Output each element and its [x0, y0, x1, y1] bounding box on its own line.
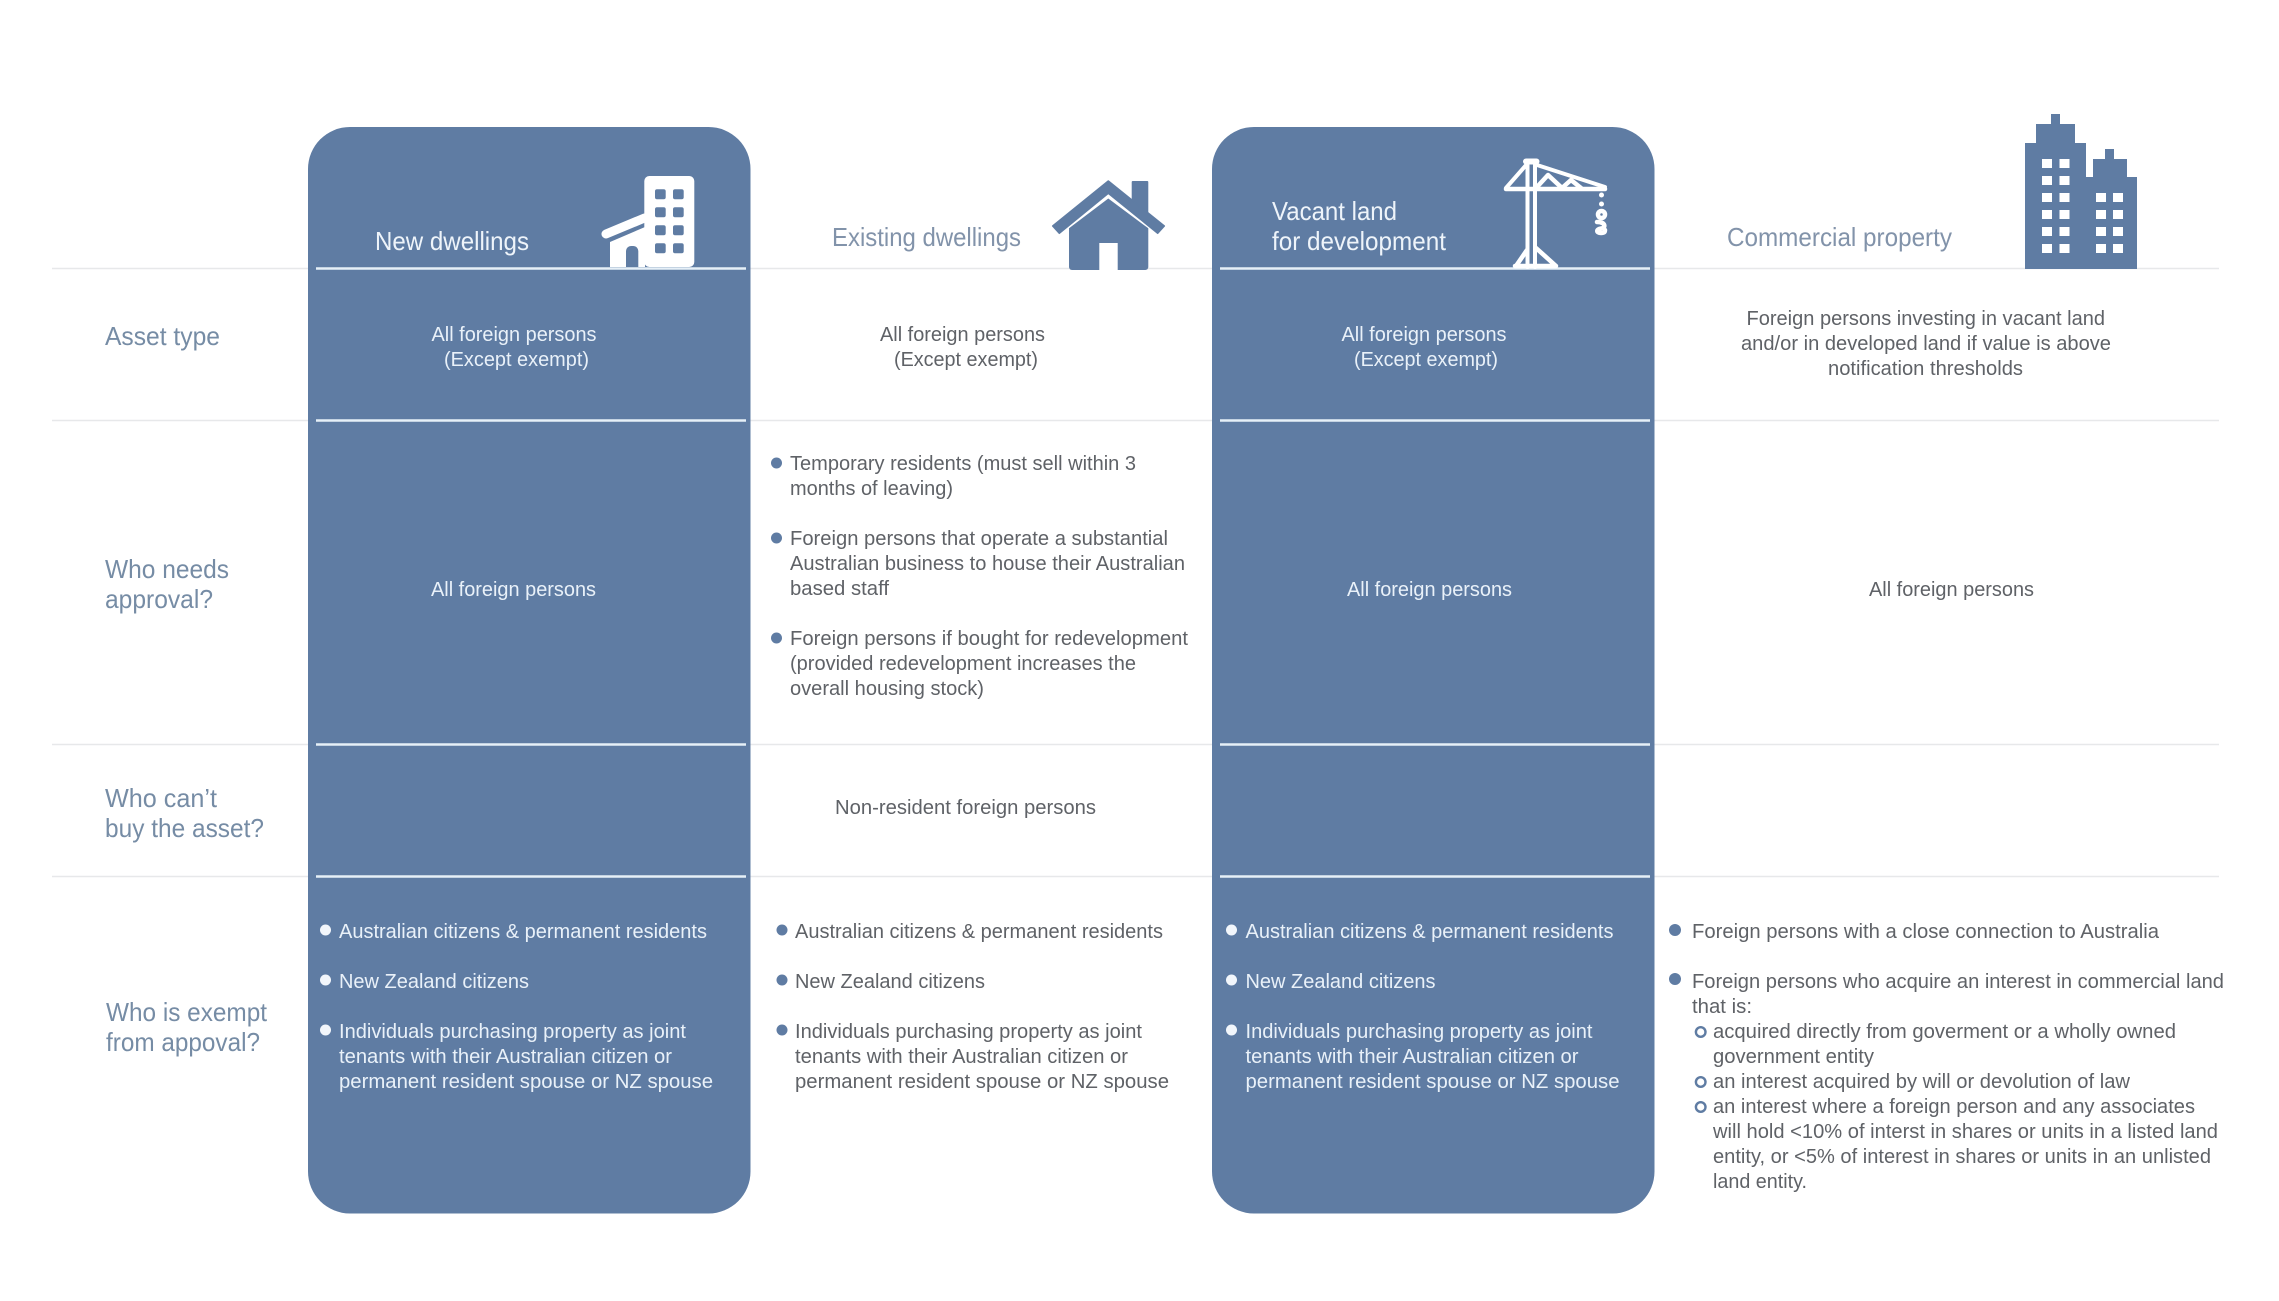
who needs approval: existing dwellings list: Temporary residents (must sell within 3: [790, 453, 1136, 475]
row label: asset type: Asset type: [105, 321, 220, 351]
panel: new dwellings column background: [308, 127, 750, 1214]
exempt list: commercial property: acquired directly from goverment or a wholly owned: [1713, 1021, 2176, 1043]
row label: who can't buy the asset: Who can’t: [105, 783, 218, 813]
exempt list: existing dwellings: [776, 921, 1169, 1093]
exempt list: commercial property: an interest where a foreign person and any associates: [1713, 1096, 2195, 1118]
exempt list: commercial property: government entity: [1713, 1046, 1874, 1068]
asset type: new dwellings: [432, 324, 596, 371]
row label: who is exempt: from appoval?: [106, 1027, 260, 1057]
asset type: commercial property: notification thresholds: [1828, 358, 2023, 380]
row label: who can't buy the asset: buy the asset?: [105, 813, 264, 843]
heading: vacant land for development: [1272, 196, 1447, 256]
exempt list: existing dwellings: Individuals purchasing property as joint: [795, 1021, 1142, 1043]
exempt list: commercial property: entity, or <5% of interest in shares or units in an unlisted: [1713, 1146, 2211, 1168]
row label: who is exempt: [106, 997, 268, 1057]
who can't buy: existing dwellings: Non-resident foreign persons: [835, 797, 1096, 819]
asset type: commercial property: and/or in developed land if value is above: [1741, 333, 2111, 355]
heading: vacant land for development: Vacant land: [1272, 196, 1397, 226]
row label: who needs approval: [105, 554, 229, 614]
who needs approval: existing dwellings list: months of leaving): [790, 478, 953, 500]
exempt list: existing dwellings: Australian citizens & permanent residents: [795, 921, 1163, 943]
asset type: existing dwellings: (Except exempt): [894, 349, 1038, 371]
asset type: existing dwellings: All foreign persons: [880, 324, 1045, 346]
exempt list: commercial property: Foreign persons with a close connection to Australia: [1692, 921, 2160, 943]
who needs approval: new dwellings: All foreign persons: [431, 579, 596, 601]
asset type: vacant land: (Except exempt): [1354, 349, 1498, 371]
exempt list: new dwellings: tenants with their Australian citizen or: [339, 1046, 672, 1068]
icon: office towers: [2025, 114, 2137, 269]
who needs approval: commercial property: All foreign persons: [1869, 579, 2034, 601]
who needs approval: existing dwellings list: Foreign persons that operate a substantial: [790, 528, 1168, 550]
exempt list: commercial property: Foreign persons who acquire an interest in commercial land: [1692, 971, 2224, 993]
row label: who needs approval: approval?: [105, 584, 213, 614]
exempt list: commercial property: that is:: [1692, 996, 1752, 1018]
exempt list: new dwellings: permanent resident spouse or NZ spouse: [339, 1071, 713, 1093]
exempt list: existing dwellings: tenants with their Australian citizen or: [795, 1046, 1128, 1068]
heading: vacant land for development: for development: [1272, 226, 1447, 256]
asset type: existing dwellings: [880, 324, 1045, 371]
heading: existing dwellings: Existing dwellings: [832, 222, 1021, 252]
who needs approval: existing dwellings list: Foreign persons if bought for redevelopment: [790, 628, 1188, 650]
exempt list: vacant land: Australian citizens & permanent residents: [1246, 921, 1614, 943]
who needs approval: existing dwellings list: (provided redevelopment increases the: [790, 653, 1136, 675]
asset type: new dwellings: All foreign persons: [432, 324, 596, 346]
who needs approval: existing dwellings list: based staff: [790, 578, 889, 600]
asset type: commercial property: Foreign persons investing in vacant land: [1746, 308, 2105, 330]
row label: who can't buy the asset: [105, 783, 264, 843]
asset type: vacant land: [1342, 324, 1506, 371]
exempt list: vacant land: New Zealand citizens: [1246, 971, 1436, 993]
row label: who needs approval: Who needs: [105, 554, 229, 584]
who needs approval: vacant land: All foreign persons: [1347, 579, 1512, 601]
icon: house: [1053, 181, 1164, 270]
exempt list: commercial property: an interest acquired by will or devolution of law: [1713, 1071, 2131, 1093]
exempt list: vacant land: permanent resident spouse or NZ spouse: [1246, 1071, 1620, 1093]
exempt list: commercial property: will hold <10% of interst in shares or units in a listed land: [1712, 1121, 2218, 1143]
who needs approval: existing dwellings list: [771, 453, 1188, 700]
exempt list: new dwellings: New Zealand citizens: [339, 971, 529, 993]
who needs approval: existing dwellings list: overall housing stock): [790, 678, 984, 700]
exempt list: new dwellings: Australian citizens & permanent residents: [339, 921, 707, 943]
row label: who is exempt: Who is exempt: [106, 997, 268, 1027]
icon: apartment building with house: [606, 176, 694, 267]
asset type: commercial property: [1741, 308, 2111, 380]
exempt list: vacant land: [1226, 921, 1620, 1093]
who needs approval: existing dwellings list: Australian business to house their Australian: [790, 553, 1185, 575]
exempt list: vacant land: tenants with their Australian citizen or: [1246, 1046, 1579, 1068]
asset type: new dwellings: (Except exempt): [444, 349, 589, 371]
icon: crane: [1506, 162, 1605, 267]
exempt list: vacant land: Individuals purchasing property as joint: [1246, 1021, 1593, 1043]
exempt list: existing dwellings: New Zealand citizens: [795, 971, 985, 993]
exempt list: commercial property: [1669, 921, 2224, 1193]
asset type: vacant land: All foreign persons: [1342, 324, 1506, 346]
exempt list: new dwellings: [320, 921, 713, 1093]
exempt list: new dwellings: Individuals purchasing property as joint: [339, 1021, 686, 1043]
heading: commercial property: Commercial property: [1727, 222, 1952, 252]
panel: vacant land column background: [1212, 127, 1654, 1214]
exempt list: existing dwellings: permanent resident spouse or NZ spouse: [795, 1071, 1169, 1093]
heading: new dwellings: New dwellings: [375, 226, 529, 256]
exempt list: commercial property: land entity.: [1713, 1171, 1807, 1193]
